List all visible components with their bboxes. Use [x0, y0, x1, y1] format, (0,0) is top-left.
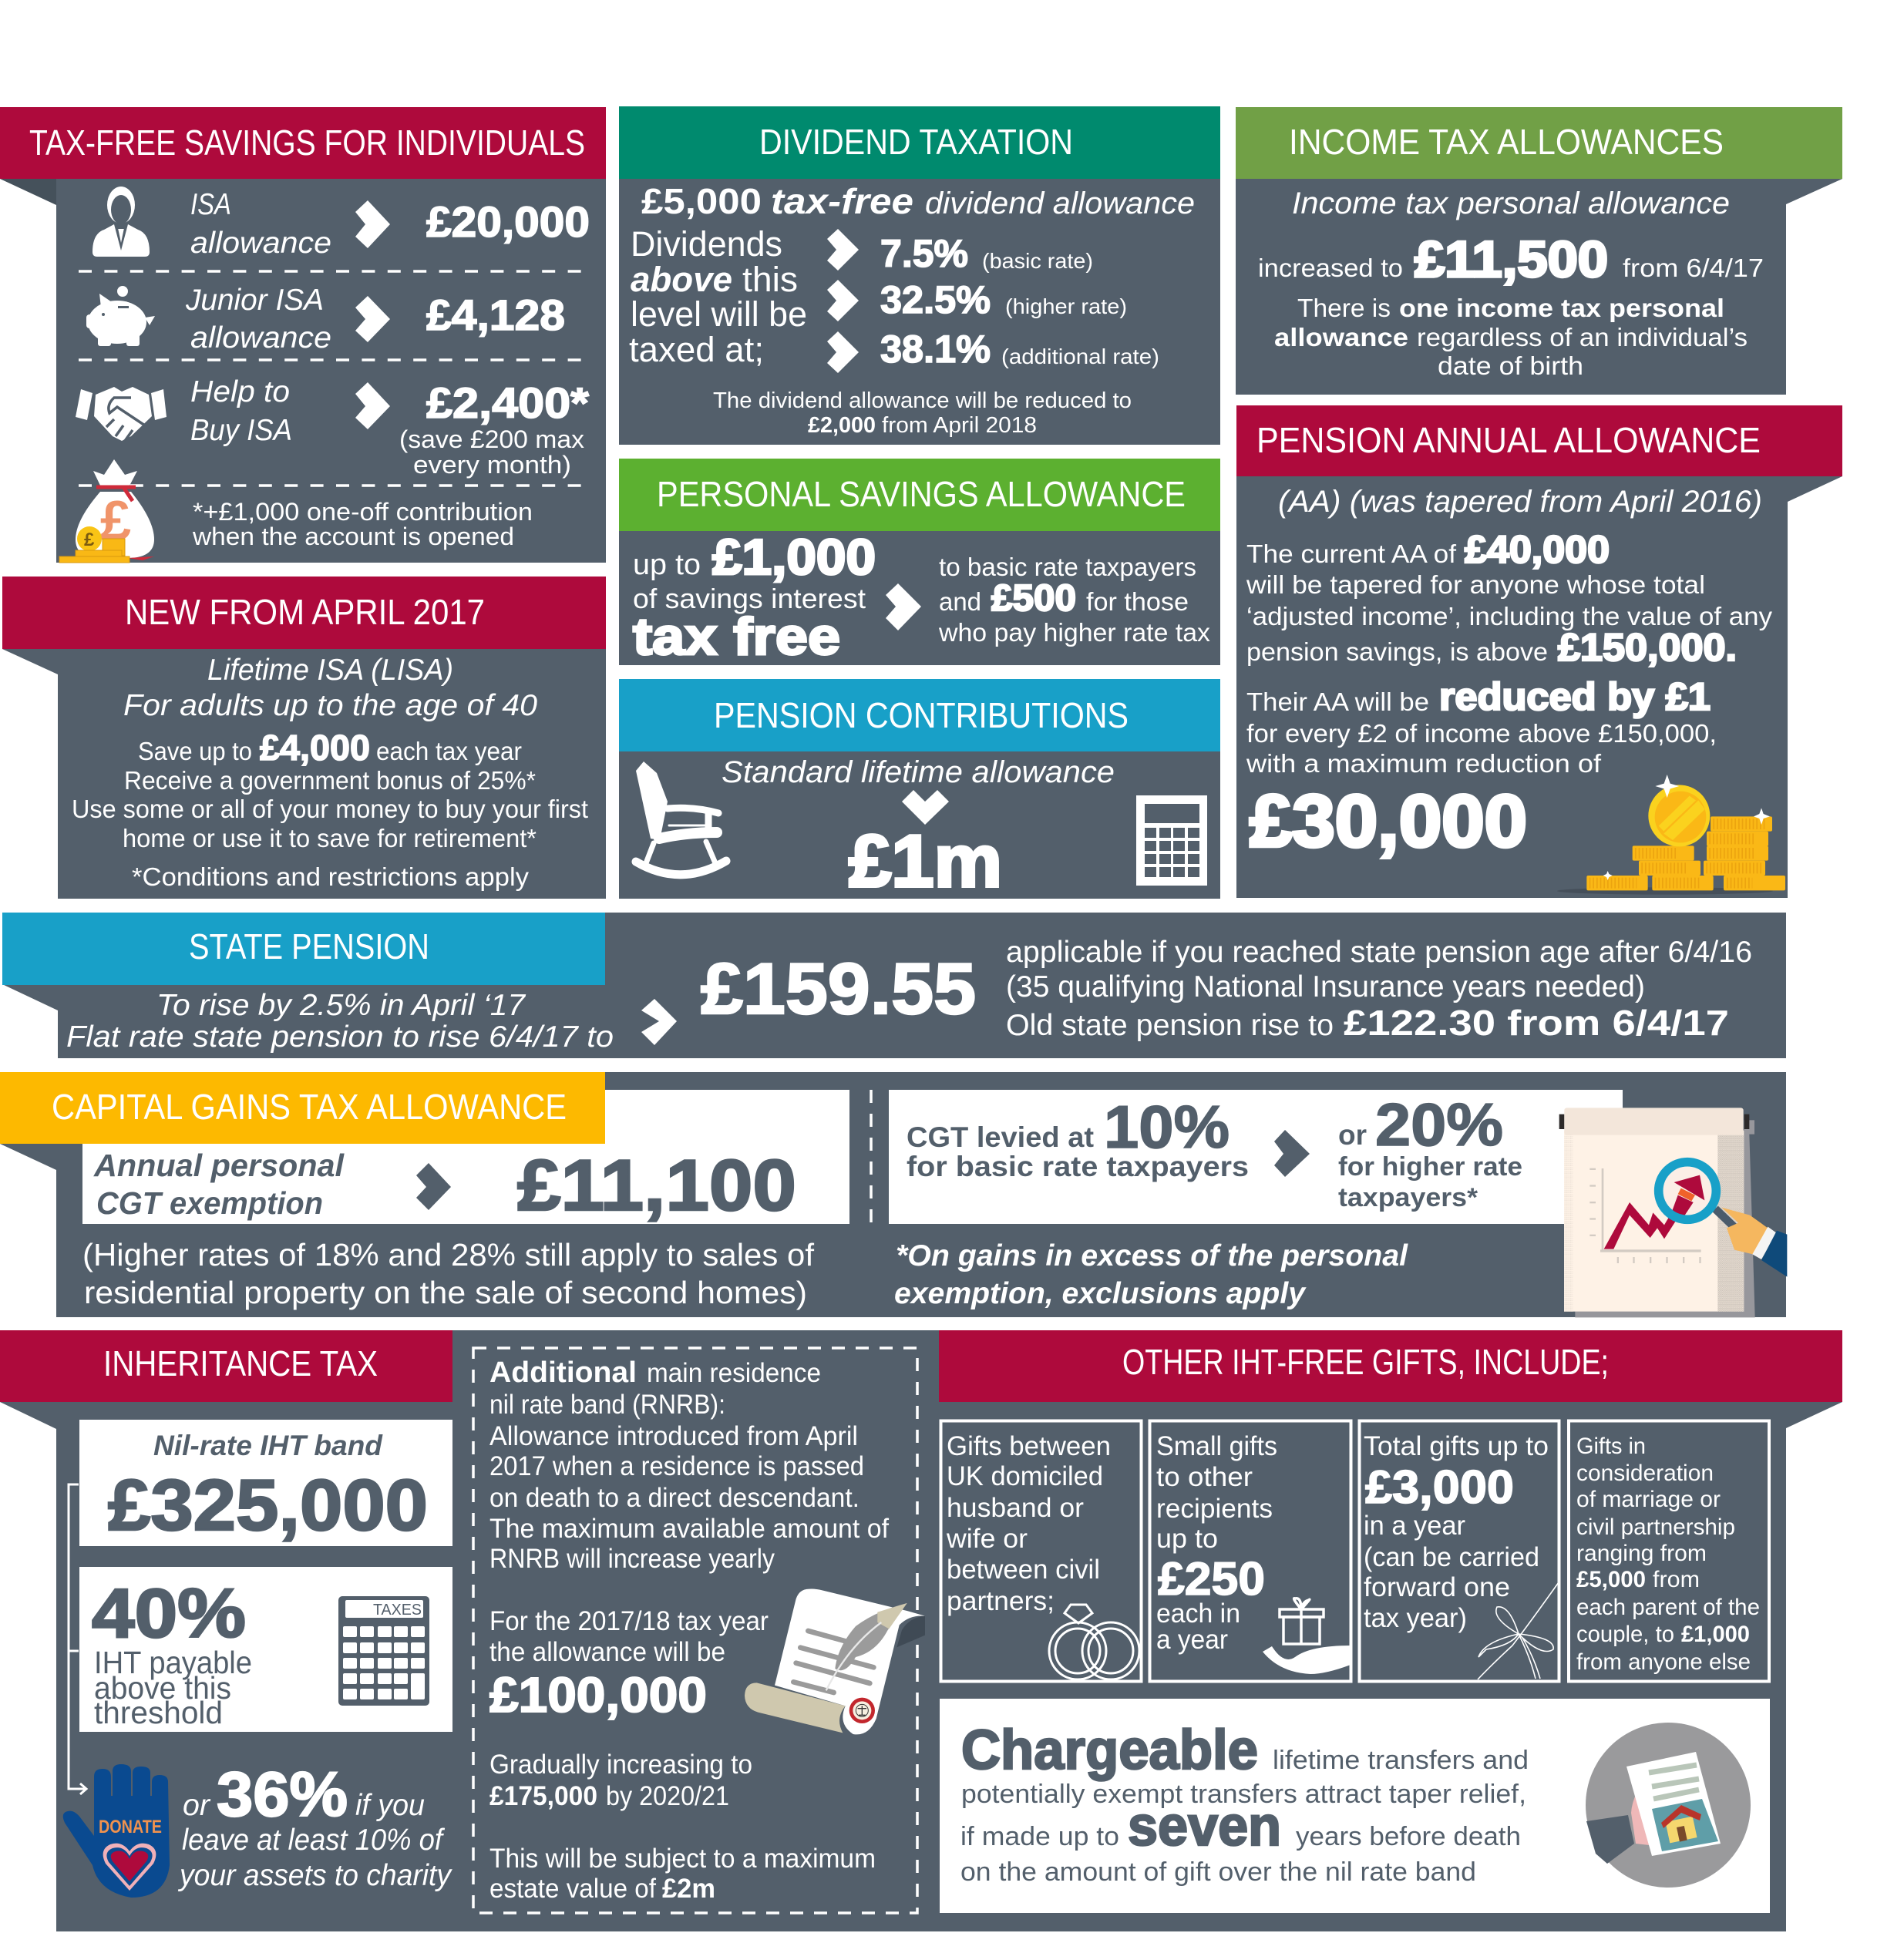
icon: chart scroll with magnifier [1559, 1108, 1787, 1317]
box: additional main residence nil rate band: by 2020/21 [606, 1781, 729, 1811]
text: LISA details: each tax year [376, 737, 522, 765]
arrows: rates [827, 229, 859, 373]
note: allowance reduction [713, 388, 1132, 438]
heading: state pension: STATE PENSION [189, 926, 429, 966]
icon: money bag with coins: £ [84, 529, 95, 550]
text: up to £1,000 tax free: up to [633, 549, 701, 581]
box: additional main residence nil rate band: Allowance introduced from April [489, 1421, 858, 1451]
rates: 7.5%, 32.5%, 38.1%: (additional rate) [1001, 345, 1159, 368]
box: 40% IHT payable: above this [94, 1670, 231, 1706]
panel: new from April 2017 [2, 577, 606, 899]
icon: ribbon bow [1478, 1582, 1559, 1679]
note: gains in excess: exemption, exclusions apply [894, 1277, 1307, 1310]
box: gifts in consideration of marriage: £1,000 [1681, 1622, 1750, 1647]
icon: will scroll with quill [745, 1589, 925, 1734]
footnote: one-off contribution: when the account is opened [192, 523, 514, 550]
text: applicable conditions: (35 qualifying National Insurance years needed) [1006, 970, 1645, 1003]
box: additional main residence nil rate band: The maximum available amount of [489, 1514, 889, 1544]
label: Junior ISA allowance [185, 284, 331, 355]
text: to rise by 2.5%: Flat rate state pension to rise 6/4/17 to [66, 1020, 614, 1054]
text: dividends above this level: above [631, 260, 732, 299]
text: £5,000 tax-free dividend allowance: dividend allowance [925, 187, 1195, 220]
note: allowance reduction: £2,000 [808, 413, 876, 438]
icon: gift on hand [1263, 1599, 1351, 1674]
box: chargeable lifetime transfers: lifetime transfers and [1273, 1746, 1529, 1775]
box: chargeable lifetime transfers: on the amount of gift over the nil rate band [960, 1857, 1476, 1887]
box: small gifts: recipients [1156, 1494, 1273, 1524]
rates: 7.5%, 32.5%, 38.1%: 38.1% [880, 328, 991, 371]
icon: piggy bank [86, 286, 155, 346]
text: applicable conditions [1006, 936, 1752, 1043]
rates: 7.5%, 32.5%, 38.1%: (basic rate) [982, 249, 1093, 273]
text: LISA details: £4,000 [260, 728, 370, 768]
note: save £200 max: (save £200 max [399, 425, 584, 453]
note: allowance reduction: The dividend allowance will be reduced to [713, 388, 1132, 413]
icon: donate hand [63, 1764, 170, 1898]
box: gifts between spouses: wife or [946, 1524, 1028, 1554]
box: nil-rate IHT band: £325,000 [108, 1464, 428, 1545]
box: 40% IHT payable: IHT payable [94, 1645, 252, 1680]
heading: pension contributions: PENSION CONTRIBUTIONS [714, 695, 1129, 735]
panel: capital gains tax allowance [0, 1072, 1787, 1317]
value: £30,000: £30,000 [1250, 780, 1527, 862]
text: applicable conditions: £122.30 from 6/4/17 [1344, 1003, 1729, 1043]
box: additional main residence nil rate band: estate value of [489, 1874, 656, 1904]
text: current AA: pension savings, is above [1246, 637, 1548, 666]
box: small gifts: £250 [1158, 1553, 1265, 1605]
box: small gifts: Small gifts [1156, 1431, 1277, 1461]
heading: inheritance tax: INHERITANCE TAX [103, 1343, 378, 1383]
text: or 20% [1338, 1091, 1522, 1212]
text: current AA: £150,000. [1558, 626, 1737, 669]
text: dividends above this level: level will be [631, 294, 807, 334]
icon: donate hand: DONATE [99, 1817, 162, 1837]
label: annual personal CGT exemption: CGT exemption [96, 1185, 323, 1221]
box: gifts between spouses: husband or [947, 1493, 1084, 1523]
box: total gifts up to £3,000: £3,000 [1365, 1461, 1514, 1513]
text: one income tax personal allowance: one income tax personal [1399, 294, 1724, 322]
text: basic and higher rate: £500 [991, 578, 1076, 619]
box: nil-rate IHT band: Nil-rate IHT band [153, 1430, 383, 1461]
note: allowance reduction: from April 2018 [882, 413, 1037, 438]
text: current AA: ‘adjusted income’, including the value of any [1246, 602, 1773, 630]
panel: personal savings allowance [619, 459, 1220, 666]
arrow: down [902, 790, 949, 825]
box: additional main residence nil rate band [473, 1348, 925, 1913]
text: increased to £11,500 [1258, 230, 1764, 287]
box: gifts in consideration of marriage: couple, to [1576, 1622, 1674, 1647]
text: or 36% if you leave at least 10%: leave at least 10% of [182, 1824, 446, 1857]
label: annual personal CGT exemption [93, 1148, 345, 1221]
panel: dividend taxation [619, 106, 1220, 445]
footnote: one-off contribution [192, 498, 533, 550]
text: applicable conditions: Old state pension rise to [1006, 1009, 1334, 1042]
rates: 7.5%, 32.5%, 38.1%: 32.5% [880, 278, 991, 321]
box: additional main residence nil rate band: £2m [662, 1874, 715, 1904]
label: ISA allowance: allowance [190, 227, 331, 260]
box: chargeable lifetime transfers: years before death [1296, 1822, 1521, 1851]
text: one income tax personal allowance: allowance [1274, 323, 1408, 351]
subheading: AA tapered: (AA) (was tapered from April 2016) [1278, 485, 1762, 519]
icon: wedding rings [1049, 1605, 1139, 1679]
text: LISA details: Save up to [138, 737, 252, 765]
box: nil-rate IHT band [79, 1420, 452, 1546]
box: gifts between spouses [940, 1421, 1141, 1682]
box: chargeable lifetime transfers: seven [1128, 1796, 1281, 1857]
icon: person in suit [93, 187, 150, 257]
footnote: one-off contribution: *+£1,000 one-off contribution [193, 498, 533, 526]
arrow: CGT rates [1274, 1130, 1310, 1177]
arrow: Junior ISA [355, 296, 390, 342]
text: LISA details [72, 728, 588, 891]
box: chargeable lifetime transfers: potentially exempt transfers attract taper relief, [961, 1780, 1526, 1809]
text: £5,000 tax-free dividend allowance [641, 181, 1195, 221]
rates: 7.5%, 32.5%, 38.1% [880, 232, 1159, 371]
text: CGT levied at 10%: for basic rate taxpayers [907, 1151, 1249, 1182]
box: gifts between spouses: Gifts between [947, 1431, 1111, 1461]
value: £2,400*: £2,400* [426, 378, 589, 427]
text: dividends above this level: taxed at; [629, 330, 764, 369]
label: Help to Buy ISA: Buy ISA [190, 414, 292, 447]
subheading: lifetime ISA [123, 654, 537, 722]
box: additional main residence nil rate band: This will be subject to a maximum [489, 1844, 876, 1874]
value: £1m: £1m [849, 820, 1002, 903]
box: additional main residence nil rate band: RNRB will increase yearly [489, 1544, 775, 1574]
box: gifts between spouses: partners; [947, 1586, 1055, 1616]
text: CGT levied at 10% [907, 1093, 1249, 1182]
box: total gifts up to £3,000: tax year) [1364, 1603, 1467, 1633]
subheading: lifetime ISA: Lifetime ISA (LISA) [207, 654, 453, 687]
text: reduced by £1: reduced by £1 [1439, 675, 1711, 718]
icon: calculator [1136, 795, 1207, 886]
text: up to £1,000 tax free: of savings interest [633, 583, 866, 614]
arrow: ISA [355, 200, 390, 248]
box: small gifts [1150, 1421, 1351, 1682]
text: or 20%: for higher rate [1338, 1152, 1522, 1182]
heading: personal savings allowance: PERSONAL SAVINGS ALLOWANCE [657, 474, 1186, 514]
box: additional main residence nil rate band: on death to a direct descendant. [489, 1483, 859, 1513]
box: small gifts: a year [1156, 1625, 1228, 1655]
text: CGT levied at 10%: 10% [1104, 1093, 1230, 1161]
box: gifts in consideration of marriage: from anyone else [1576, 1649, 1751, 1675]
connector lines [69, 1484, 86, 1794]
text: reduced by £1: Their AA will be [1246, 687, 1429, 716]
text: one income tax personal allowance: regardless of an individual’s [1417, 323, 1748, 351]
note: higher rates: residential property on the sale of second homes) [84, 1275, 807, 1310]
arrow: Help to Buy [355, 382, 390, 429]
arrow: state pension [641, 999, 677, 1045]
heading: tax-free savings: TAX-FREE SAVINGS FOR INDIVIDUALS [29, 123, 585, 163]
box: additional main residence nil rate band: Gradually increasing to [489, 1750, 752, 1780]
box: additional main residence nil rate band: £100,000 [489, 1667, 707, 1723]
box: total gifts up to £3,000: in a year [1364, 1511, 1465, 1541]
rates: 7.5%, 32.5%, 38.1%: (higher rate) [1005, 294, 1127, 318]
box: gifts in consideration of marriage: from [1653, 1567, 1700, 1592]
note: higher rates [82, 1237, 815, 1310]
note: higher rates: (Higher rates of 18% and 28% still apply to sales of [82, 1237, 815, 1272]
box: small gifts: each in [1156, 1599, 1240, 1629]
box: 40% IHT payable [79, 1567, 452, 1732]
box: annual exemption [82, 1090, 849, 1224]
box: gifts between spouses: UK domiciled [947, 1461, 1103, 1491]
text: LISA details: home or use it to save for retirement* [123, 824, 537, 852]
box: gifts in consideration of marriage: Gifts in [1576, 1434, 1646, 1459]
label: Help to Buy ISA: Help to [190, 375, 290, 408]
panel: income tax allowances [1236, 107, 1842, 395]
text: one income tax personal allowance: date of birth [1438, 351, 1583, 380]
text: or 20%: taxpayers* [1338, 1183, 1478, 1212]
box: 40% IHT payable: 40% [92, 1575, 246, 1652]
box: chargeable lifetime transfers: if made up to [960, 1822, 1119, 1851]
panel: pension contributions [619, 679, 1220, 903]
arrow: CGT [416, 1163, 451, 1210]
heading: capital gains tax allowance: CAPITAL GAINS TAX ALLOWANCE [52, 1087, 567, 1127]
text: dividends above this level: Dividends [631, 224, 782, 264]
note: save £200 max: every month) [413, 451, 571, 479]
icon: rocking chair [636, 761, 726, 875]
box: total gifts up to £3,000 [1360, 1421, 1559, 1682]
text: current AA: will be tapered for anyone whose total [1246, 570, 1705, 599]
text: CGT levied at 10%: CGT levied at [907, 1121, 1094, 1153]
text: increased to £11,500: increased to [1258, 254, 1403, 282]
text: reduced by £1: with a maximum reduction of [1246, 749, 1602, 778]
heading: pension annual allowance: PENSION ANNUAL ALLOWANCE [1256, 420, 1761, 460]
text: or 36% if you leave at least 10% [177, 1760, 452, 1892]
panel: tax-free savings for individuals [0, 107, 606, 563]
panel: inheritance tax and gifts [0, 1330, 1842, 1931]
panel: pension annual allowance [1236, 405, 1842, 898]
box: small gifts: up to [1156, 1524, 1218, 1554]
box: additional main residence nil rate band: nil rate band (RNRB): [489, 1390, 725, 1420]
box: additional main residence nil rate band: £175,000 [489, 1781, 597, 1811]
value: £20,000: £20,000 [426, 197, 590, 246]
text: basic and higher rate: for those [1086, 587, 1189, 616]
box: chargeable lifetime transfers [940, 1699, 1770, 1913]
text: dividends above this level: this [742, 260, 798, 299]
text: or 36% if you leave at least 10%: if you [355, 1789, 425, 1822]
box: gifts in consideration of marriage: each parent of the [1576, 1595, 1760, 1620]
box: gifts in consideration of marriage: ranging from [1576, 1541, 1707, 1566]
text: increased to £11,500: £11,500 [1415, 230, 1608, 287]
text: reduced by £1 [1246, 675, 1717, 778]
text: £5,000 tax-free dividend allowance: £5,000 [641, 181, 762, 221]
text: applicable conditions: applicable if you reached state pension age after 6/4/16 [1006, 936, 1752, 969]
text: basic and higher rate: who pay higher rate tax [938, 618, 1211, 647]
box: gifts in consideration of marriage: of marriage or [1576, 1487, 1721, 1512]
text: current AA: £40,000 [1465, 528, 1610, 571]
text: increased to £11,500: from 6/4/17 [1623, 254, 1764, 282]
box: additional main residence nil rate band: Additional [489, 1356, 637, 1389]
box: total gifts up to £3,000: (can be carried [1364, 1542, 1539, 1572]
text: LISA details: Receive a government bonus of 25%* [124, 766, 536, 795]
text: or 36% if you leave at least 10%: 36% [217, 1760, 348, 1830]
text: reduced by £1: for every £2 of income above £150,000, [1246, 719, 1717, 748]
icon: gold coins [1557, 775, 1785, 895]
icon: money bag with coins [59, 459, 154, 563]
label: Help to Buy ISA [190, 375, 292, 447]
text: or 20%: or [1338, 1119, 1367, 1151]
text: or 36% if you leave at least 10%: or [183, 1789, 211, 1822]
label: Junior ISA allowance: Junior ISA [185, 284, 324, 317]
text: to rise by 2.5% [66, 989, 614, 1054]
text: £5,000 tax-free dividend allowance: tax-free [771, 181, 913, 221]
box: chargeable lifetime transfers: Chargeable [961, 1720, 1258, 1781]
box: gifts in consideration of marriage: civil partnership [1576, 1514, 1735, 1540]
value: £11,100: £11,100 [517, 1145, 796, 1225]
text: basic and higher rate: to basic rate taxpayers [939, 553, 1196, 581]
text: up to £1,000 tax free: £1,000 [712, 529, 876, 585]
box: small gifts: to other [1156, 1462, 1253, 1492]
label: annual personal CGT exemption: Annual personal [93, 1148, 345, 1183]
box: additional main residence nil rate band: 2017 when a residence is passed [489, 1451, 864, 1481]
box: additional main residence nil rate band: For the 2017/18 tax year [489, 1606, 769, 1636]
heading: other IHT-free gifts: OTHER IHT-FREE GIFTS, INCLUDE; [1122, 1342, 1609, 1382]
text: to rise by 2.5%: To rise by 2.5% in April ‘17 [156, 989, 526, 1022]
label: ISA allowance [190, 188, 331, 260]
icon: handshake [76, 387, 167, 441]
heading: new from April 2017: NEW FROM APRIL 2017 [125, 592, 485, 632]
box: gifts between spouses: between civil [947, 1555, 1100, 1585]
text: one income tax personal allowance: There is [1297, 294, 1391, 322]
icon: taxes calculator: TAXES [373, 1602, 422, 1619]
box: gifts in consideration of marriage: consideration [1576, 1461, 1714, 1486]
box: additional main residence nil rate band: the allowance will be [489, 1637, 725, 1667]
text: or 36% if you leave at least 10%: your assets to charity [177, 1859, 452, 1892]
text: basic and higher rate [938, 553, 1211, 647]
box: gifts in consideration of marriage [1569, 1421, 1769, 1682]
text: LISA details: Use some or all of your money to buy your first [72, 795, 588, 823]
text: one income tax personal allowance [1274, 294, 1748, 380]
label: Junior ISA allowance: allowance [190, 321, 331, 355]
icon: hand holding house document [1586, 1723, 1751, 1888]
box: gifts in consideration of marriage: £5,000 [1576, 1567, 1646, 1592]
heading: income tax allowances: INCOME TAX ALLOWANCES [1289, 122, 1724, 162]
box: total gifts up to £3,000: Total gifts up to [1364, 1431, 1549, 1461]
text: current AA: The current AA of [1246, 540, 1457, 568]
box: total gifts up to £3,000: forward one [1364, 1572, 1510, 1602]
note: save £200 max [399, 425, 584, 479]
arrow: savings [886, 583, 921, 630]
heading: dividend taxation: DIVIDEND TAXATION [759, 122, 1073, 162]
box: 40% IHT payable: threshold [94, 1695, 223, 1730]
text: up to £1,000 tax free [633, 529, 876, 666]
text: or 20%: 20% [1375, 1091, 1503, 1158]
value: £159.55: £159.55 [701, 948, 976, 1029]
text: basic and higher rate: and [939, 587, 981, 616]
subheading: standard lifetime allowance: Standard lifetime allowance [722, 755, 1115, 789]
icon: money bag with coins: £ [100, 490, 131, 552]
note: gains in excess: *On gains in excess of the personal [896, 1239, 1408, 1272]
text: current AA [1246, 528, 1773, 669]
panel: state pension [2, 913, 1786, 1058]
subheading: income tax personal allowance: Income tax personal allowance [1292, 187, 1730, 220]
subheading: lifetime ISA: For adults up to the age of 40 [123, 689, 537, 722]
value: £4,128: £4,128 [426, 291, 565, 339]
text: dividends above this level [629, 224, 807, 369]
icon: taxes calculator [338, 1596, 429, 1706]
note: gains in excess [894, 1239, 1408, 1310]
box: additional main residence nil rate band: main residence [647, 1358, 821, 1388]
rates: 7.5%, 32.5%, 38.1%: 7.5% [880, 232, 968, 275]
text: LISA details: *Conditions and restrictions apply [132, 862, 530, 891]
text: up to £1,000 tax free: tax free [633, 607, 840, 666]
label: ISA allowance: ISA [190, 188, 231, 221]
